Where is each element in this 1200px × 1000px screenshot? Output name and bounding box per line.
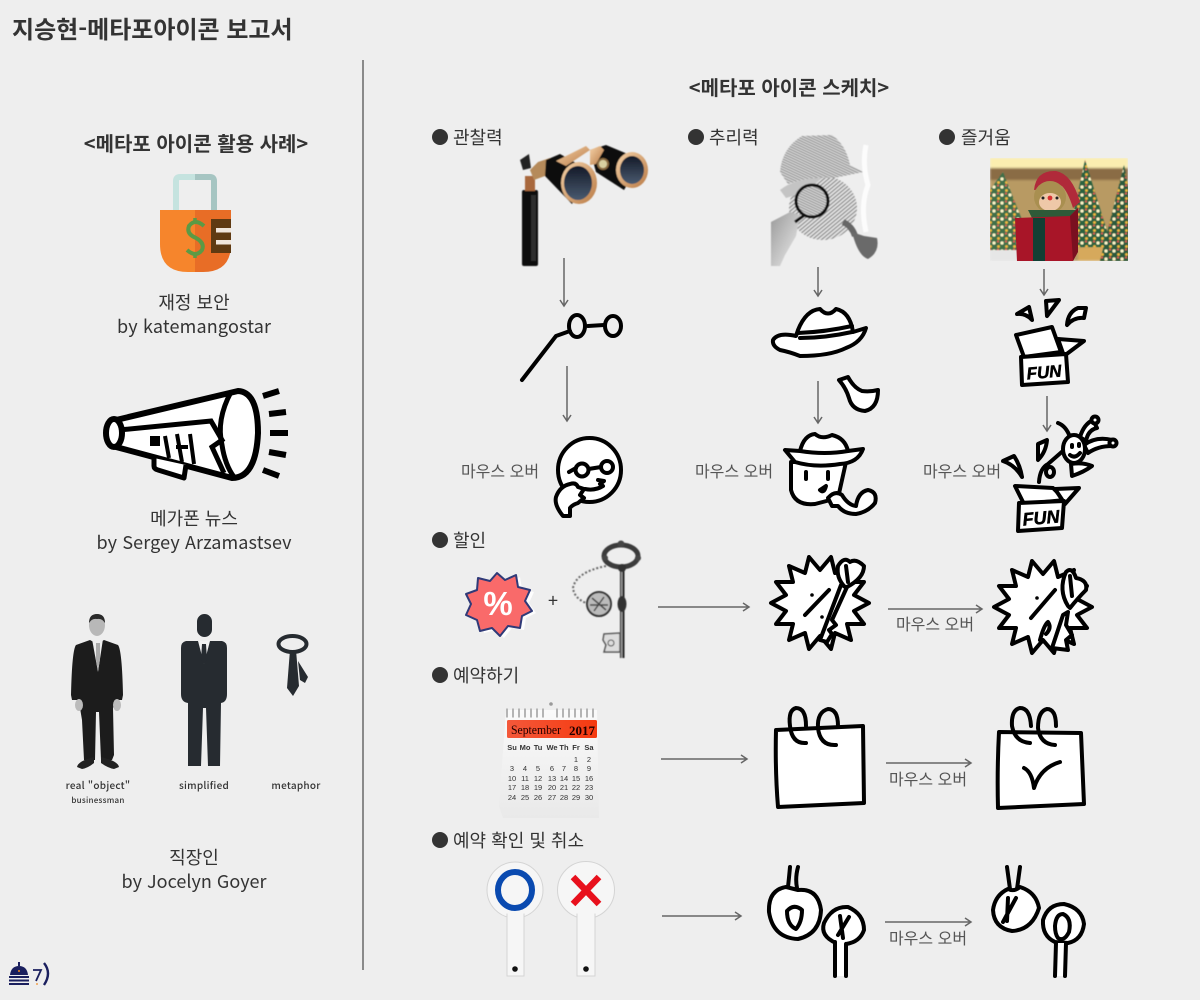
section: booking	[432, 662, 1084, 818]
photo: tear-off calendar: 8	[574, 764, 578, 773]
photo: tear-off calendar: 12	[534, 774, 542, 783]
sketch: price burst with key	[771, 557, 869, 649]
photo: tear-off calendar: 2017	[569, 723, 596, 738]
caption: financial security: by katemangostar	[117, 313, 272, 339]
photo: tear-off calendar: 5	[536, 764, 540, 773]
section label: discount: 할인	[453, 527, 486, 553]
photo: antique key	[573, 540, 641, 658]
photo: tear-off calendar: 23	[585, 783, 593, 792]
panel: metaphor icon use cases	[66, 128, 321, 894]
photo: tear-off calendar: 2	[587, 755, 591, 764]
section label: booking: 예약하기	[453, 662, 519, 688]
sketch: burst with unlocked key	[994, 561, 1092, 653]
labels: real object, simplified, metaphor: real "object"	[66, 777, 130, 792]
arrow	[662, 912, 741, 920]
section: observation	[432, 124, 648, 516]
section: fun	[923, 124, 1142, 531]
sketch: closed fun box: FUN	[1026, 361, 1063, 383]
arrow	[658, 603, 749, 611]
sketch: jester in fun box	[1003, 416, 1116, 531]
icon: megaphone	[106, 391, 288, 478]
sketch: jester in fun box: FUN	[1022, 506, 1061, 530]
photo: tear-off calendar: Fr	[572, 743, 580, 752]
photo: tear-off calendar: 30	[585, 793, 593, 802]
heading: use cases: <메타포 아이콘 활용 사례>	[84, 128, 308, 157]
caption: megaphone news: by Sergey Arzamastsev	[96, 529, 292, 555]
photo: tear-off calendar: 28	[560, 793, 568, 802]
photo: tear-off calendar: 3	[510, 764, 514, 773]
photo: tear-off calendar: 26	[534, 793, 542, 802]
label: mouse over: 마우스 오버	[889, 766, 967, 790]
photo: fingerprint detective	[771, 135, 878, 266]
caption: office worker	[122, 844, 268, 894]
title: 지승현-메타포아이콘 보고서	[12, 10, 293, 45]
section: deduction	[688, 124, 878, 514]
photo: opera glasses	[520, 145, 648, 266]
photo: tear-off calendar: 14	[560, 774, 568, 783]
icon: simplified businessman	[181, 614, 227, 766]
photo: tear-off calendar: 4	[523, 764, 527, 773]
photo: tear-off calendar: 29	[572, 793, 580, 802]
caption: office worker: by Jocelyn Goyer	[122, 868, 268, 894]
photo: tear-off calendar: 21	[560, 783, 568, 792]
sketch: pipe	[839, 377, 878, 411]
arrow	[886, 759, 971, 767]
sketch: lorgnette	[522, 315, 621, 380]
photo: tear-off calendar: 20	[548, 783, 556, 792]
label: mouse over: 마우스 오버	[461, 458, 539, 482]
photo: tear-off calendar: September	[511, 722, 562, 737]
photo: tear-off calendar: 6	[550, 764, 554, 773]
arrow	[1043, 396, 1051, 431]
section label: discount	[432, 527, 486, 553]
heading: sketches: <메타포 아이콘 스케치>	[689, 72, 889, 101]
sketch: O and X paddles	[769, 867, 864, 976]
section: booking confirm and cancel	[432, 827, 1084, 976]
icon: businessman photo	[71, 614, 123, 769]
labels: real object, simplified, metaphor	[66, 777, 321, 806]
photo: tear-off calendar: 11	[521, 774, 529, 783]
photo: tear-off calendar: Sa	[584, 743, 594, 752]
photo: tear-off calendar: 1	[574, 755, 578, 764]
labels: real object, simplified, metaphor: simplified	[179, 777, 229, 792]
sketch: closed fun box	[1016, 300, 1086, 385]
labels: real object, simplified, metaphor: businessman	[71, 795, 125, 806]
icon: X paddle	[558, 862, 614, 976]
photo: tear-off calendar: 16	[585, 774, 593, 783]
photo: tear-off calendar: 10	[508, 774, 516, 783]
photo: tear-off calendar: 22	[572, 783, 580, 792]
caption: megaphone news: 메가폰 뉴스	[150, 505, 238, 531]
section: discount	[432, 527, 1092, 658]
photo: tear-off calendar: 27	[548, 793, 556, 802]
arrow	[563, 366, 571, 421]
icon: percent badge: %	[483, 585, 513, 622]
plus sign: +	[548, 587, 558, 613]
label: mouse over: 마우스 오버	[695, 458, 773, 482]
sketch: detective face with pipe	[785, 434, 876, 514]
sketch: hat	[773, 309, 866, 356]
icon: O paddle	[487, 862, 543, 976]
photo: tear-off calendar	[499, 702, 599, 818]
photo: tear-off calendar: Su	[507, 743, 517, 752]
sketch: blank calendar	[776, 708, 864, 807]
icon: necktie metaphor	[278, 636, 308, 696]
arrow	[560, 258, 568, 306]
photo: tear-off calendar: We	[546, 743, 558, 752]
labels: real object, simplified, metaphor: metaphor	[271, 777, 321, 792]
caption: megaphone news	[96, 505, 292, 555]
label: mouse over: 마우스 오버	[896, 611, 974, 635]
arrow	[1040, 269, 1048, 295]
photo: tear-off calendar: 25	[521, 793, 529, 802]
sketch: thinking face with glasses	[556, 438, 621, 516]
icon: financial security lock	[160, 177, 231, 272]
icon: percent badge	[466, 573, 536, 638]
photo: tear-off calendar: Th	[559, 743, 569, 752]
photo: tear-off calendar: 19	[534, 783, 542, 792]
photo: tear-off calendar: Mo	[520, 743, 531, 752]
caption: office worker: 직장인	[169, 844, 219, 870]
vertical divider	[362, 60, 364, 970]
photo: tear-off calendar: 18	[521, 783, 529, 792]
photo: tear-off calendar: 17	[508, 783, 516, 792]
caption: financial security: 재정 보안	[158, 289, 230, 315]
label: mouse over: 마우스 오버	[889, 925, 967, 949]
arrow	[661, 755, 747, 763]
photo: tear-off calendar: 7	[562, 764, 566, 773]
section label: observation: 관찰력	[453, 124, 503, 150]
panel: metaphor icon sketches	[432, 72, 1142, 976]
photo: tear-off calendar: 24	[508, 793, 516, 802]
label: mouse over: 마우스 오버	[923, 458, 1001, 482]
section label: deduction: 추리력	[709, 124, 759, 150]
logo	[9, 962, 48, 985]
photo: doll in a gift box	[990, 158, 1142, 261]
arrow	[814, 381, 822, 423]
section label: confirm and cancel: 예약 확인 및 취소	[453, 827, 584, 853]
arrow	[888, 605, 982, 613]
photo: tear-off calendar: 15	[572, 774, 580, 783]
sketch: calendar with check mark	[998, 708, 1084, 808]
photo: tear-off calendar: Tu	[534, 743, 543, 752]
section label: fun	[939, 124, 1011, 150]
section label: fun: 즐거움	[961, 124, 1011, 150]
sketch: X and O paddles flipped	[993, 867, 1084, 976]
caption: financial security	[117, 289, 272, 339]
photo: tear-off calendar: 9	[587, 764, 591, 773]
arrow	[814, 267, 822, 296]
photo: tear-off calendar: 13	[548, 774, 556, 783]
arrow	[885, 918, 971, 926]
